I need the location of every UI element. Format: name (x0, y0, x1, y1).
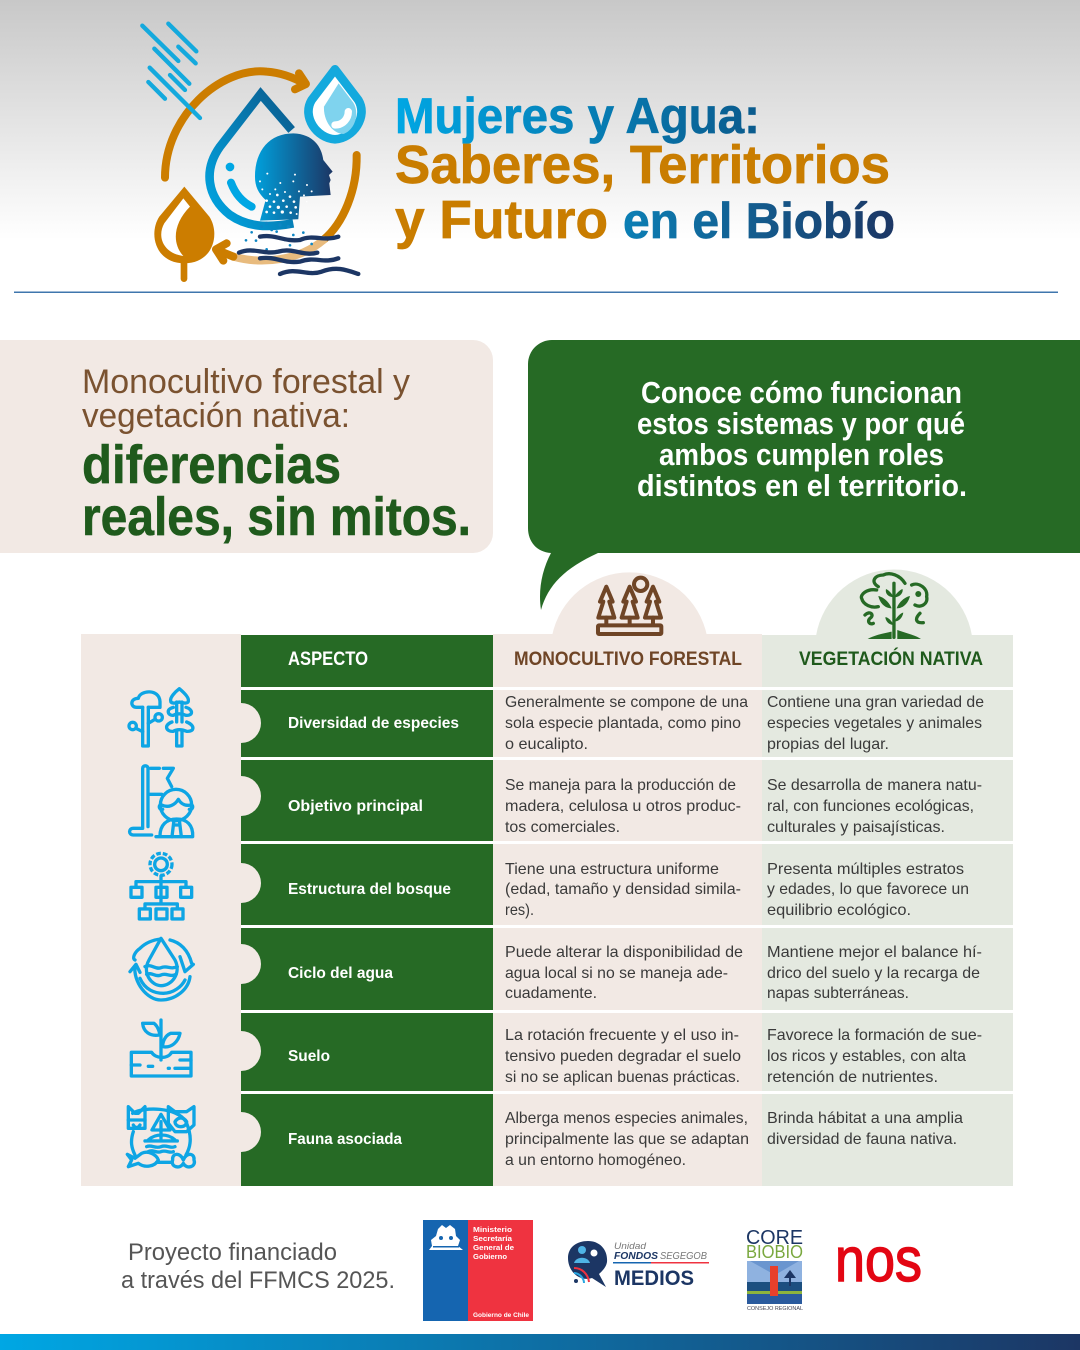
logo: ministerio: Ministerio (473, 1225, 513, 1234)
row: fauna asociada: Brinda hábitat a una amplia (767, 1110, 963, 1127)
row: diversidad de especies (221, 690, 1013, 757)
icon: water cycle (130, 938, 193, 1000)
header row: VEGETACIÓN NATIVA (799, 648, 983, 670)
dissolving dots (259, 173, 313, 215)
logo: nos: nos (835, 1226, 922, 1295)
row: ciclo del agua: Puede alterar la disponibilidad de (505, 944, 743, 961)
row: suelo: si no se aplican buenas prácticas. (505, 1069, 740, 1086)
wave lines (239, 236, 358, 274)
icon: person and goal flag (130, 766, 193, 837)
speech bubble callout: estos sistemas y por qué (637, 406, 965, 441)
footer text: Proyecto financiado (128, 1239, 337, 1266)
row: objetivo principal (221, 760, 1013, 841)
speech bubble callout (528, 340, 1080, 610)
row: ciclo del agua (221, 928, 1013, 1010)
logo: ministerio: Gobierno de Chile (473, 1312, 529, 1319)
panel: heading: vegetación nativa: (82, 397, 350, 435)
row: ciclo del agua: Ciclo del agua (288, 965, 393, 982)
row: diversidad de especies: Generalmente se compone de una (505, 694, 748, 711)
icon: native tree (861, 574, 927, 639)
header row: MONOCULTIVO FORESTAL (514, 649, 742, 670)
row: diversidad de especies: o eucalipto. (505, 736, 588, 753)
speech bubble callout: distintos en el territorio. (637, 468, 967, 503)
logo: ministerio: General de (473, 1243, 514, 1252)
logo: core biobio: CORE (746, 1227, 803, 1249)
row: suelo: La rotación frecuente y el uso in- (505, 1027, 739, 1044)
row: fauna asociada: Fauna asociada (288, 1131, 402, 1148)
icon: associated fauna (127, 1107, 194, 1167)
icon: forest plantation (598, 578, 661, 634)
footer text: a través del FFMCS 2025. (121, 1267, 395, 1294)
row: ciclo del agua: agua local si no se maneja ade- (505, 965, 728, 982)
logo: ministerio: Gobierno (473, 1252, 507, 1261)
panel: heading: diferencias (82, 435, 341, 495)
icon: organisation structure with gear (131, 853, 192, 919)
row: objetivo principal: Se desarrolla de manera natu- (767, 777, 982, 794)
panel: heading: Monocultivo forestal y (82, 363, 410, 401)
header row (241, 634, 1013, 687)
logo: ministerio (423, 1220, 533, 1321)
woman's head (255, 133, 333, 221)
row: objetivo principal: Objetivo principal (288, 798, 423, 815)
logo: core biobio (746, 1227, 803, 1312)
logo: ministerio: Secretaría (473, 1234, 513, 1243)
speech bubble callout: Conoce cómo funcionan (641, 375, 962, 410)
row: fauna asociada: Alberga menos especies animales, (505, 1110, 748, 1127)
title: Saberes, Territorios (395, 135, 890, 195)
row: suelo: tensivo pueden degradar el suelo (505, 1048, 741, 1065)
header row: ASPECTO (288, 649, 368, 670)
row: diversidad de especies: sola especie plantada, como pino (505, 715, 741, 732)
row: suelo: los ricos y estables, con alta (767, 1048, 966, 1065)
header background (0, 0, 1080, 240)
row: suelo: Suelo (288, 1048, 330, 1065)
title (395, 88, 895, 250)
row: estructura del bosque: equilibrio ecológico. (767, 902, 911, 919)
dome: monocultivo (552, 572, 707, 636)
large drop outline (210, 94, 293, 226)
rain lines (142, 24, 200, 118)
crest (429, 1225, 463, 1250)
row: fauna asociada: principalmente las que se adaptan (505, 1131, 749, 1148)
logo: fondos medios (568, 1241, 709, 1290)
icon: trees (129, 689, 193, 746)
logo: core biobio: CONSEJO REGIONAL (747, 1306, 803, 1312)
panel: heading: reales, sin mitos. (82, 487, 471, 547)
title: en el Biobío (623, 193, 895, 249)
row: objetivo principal: culturales y paisajísticas. (767, 819, 945, 836)
orange cycle arrows (165, 71, 357, 261)
table (81, 634, 1013, 1186)
row: objetivo principal: ral, con funciones ecológicas, (767, 798, 974, 815)
row: diversidad de especies: especies vegetales y animales (767, 715, 982, 732)
row: suelo: Favorece la formación de sue- (767, 1027, 982, 1044)
row: suelo: retención de nutrientes. (767, 1069, 938, 1086)
icon column background (81, 634, 241, 1186)
header logo: water, woman and leaf cycle (142, 24, 362, 279)
row: ciclo del agua: napas subterráneas. (767, 985, 909, 1002)
row: diversidad de especies: Diversidad de especies (288, 715, 459, 732)
logo: fondos medios: Unidad (614, 1241, 647, 1252)
footer text (121, 1239, 395, 1294)
row: estructura del bosque: res). (505, 902, 534, 919)
speech bubble callout: ambos cumplen roles (659, 437, 944, 472)
title: y Futuro (395, 190, 608, 250)
row: diversidad de especies: propias del lugar. (767, 736, 889, 753)
panel: heading (0, 340, 493, 553)
row: estructura del bosque: (edad, tamaño y densidad simila- (505, 881, 741, 898)
row: ciclo del agua: Mantiene mejor el balance hí- (767, 944, 982, 961)
row: estructura del bosque: y edades, lo que favorece un (767, 881, 969, 898)
icon: soil and sprout (131, 1020, 191, 1076)
logo: fondos medios: MEDIOS (614, 1267, 694, 1290)
row: fauna asociada: diversidad de fauna nativa. (767, 1131, 957, 1148)
dome: vegetación nativa (816, 570, 972, 636)
row: estructura del bosque: Estructura del bosque (288, 881, 451, 898)
row: objetivo principal: Se maneja para la producción de (505, 777, 736, 794)
row: fauna asociada: a un entorno homogéneo. (505, 1152, 686, 1169)
row: fauna asociada (221, 1094, 1013, 1186)
row: diversidad de especies: Contiene una gran variedad de (767, 694, 984, 711)
logo: fondos medios: SEGEGOB (660, 1250, 707, 1262)
row: suelo (221, 1013, 1013, 1091)
title: Mujeres y Agua: (395, 88, 760, 144)
row: estructura del bosque (221, 844, 1013, 925)
row: ciclo del agua: drico del suelo y la recarga de (767, 965, 980, 982)
row: objetivo principal: madera, celulosa u otros produc- (505, 798, 741, 815)
row: objetivo principal: tos comerciales. (505, 819, 620, 836)
row: ciclo del agua: cuadamente. (505, 985, 597, 1002)
bottom gradient bar (0, 1334, 1080, 1350)
row: estructura del bosque: Tiene una estructura uniforme (505, 861, 719, 878)
small water drop (308, 69, 362, 139)
logo: core biobio: BIOBIO (746, 1242, 803, 1262)
row: estructura del bosque: Presenta múltiples estratos (767, 861, 964, 878)
logo: fondos medios: FONDOS (614, 1250, 658, 1262)
leaf (154, 187, 214, 263)
